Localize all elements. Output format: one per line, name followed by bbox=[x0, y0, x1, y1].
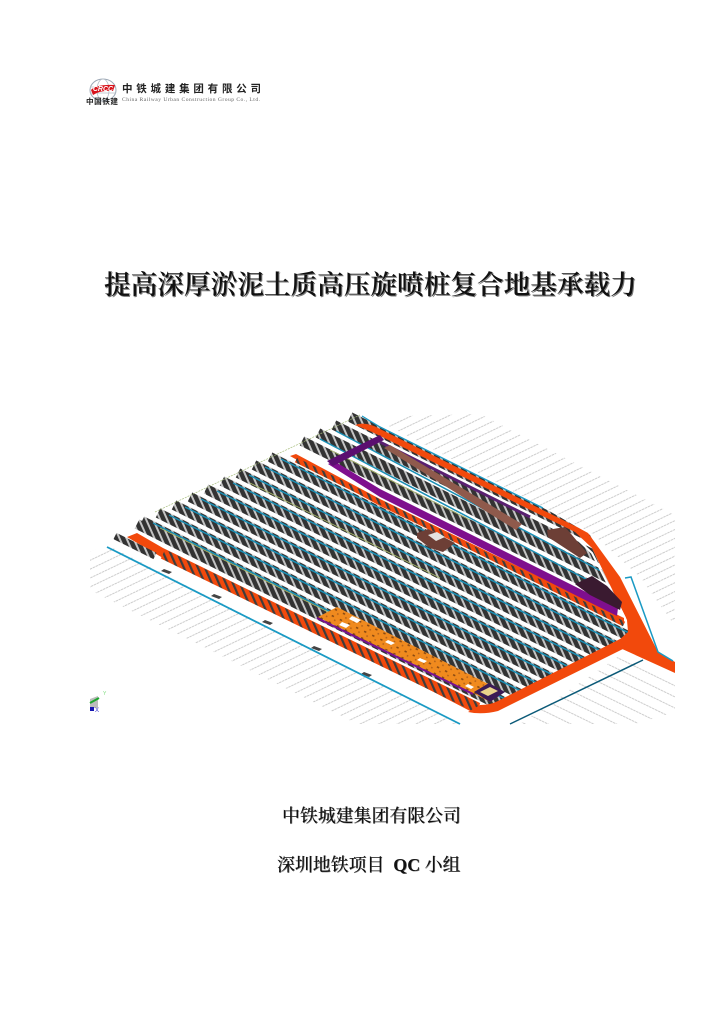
hatch: upper right grid bbox=[385, 414, 675, 626]
brown block centre bbox=[417, 529, 455, 552]
left edge survey line bbox=[155, 415, 360, 512]
teeth over orange strip bbox=[163, 554, 478, 708]
company logo bbox=[86, 78, 261, 106]
blue rails bbox=[152, 430, 628, 699]
orange work zone bbox=[318, 607, 504, 702]
yellow block bbox=[474, 683, 505, 702]
left end piles bbox=[115, 536, 155, 556]
green survey lines bbox=[160, 450, 470, 613]
white inner edge bbox=[372, 436, 625, 618]
orange bottom strip bbox=[127, 533, 480, 712]
dark blue dimension line bbox=[510, 660, 643, 724]
axis icon: Y bbox=[103, 691, 107, 697]
upper orange edge bbox=[355, 424, 675, 673]
title: 提高深厚淤泥土质高压旋喷桩复合地基承载力 bbox=[104, 270, 637, 300]
icon: CRCC globe emblem: CRCC bbox=[93, 86, 114, 93]
3D site model bbox=[90, 412, 675, 725]
logo company name: 中铁城建集团有限公司 bbox=[122, 82, 261, 95]
blue outer line right bbox=[625, 577, 673, 661]
brown beam bbox=[384, 445, 522, 530]
blue outer line lower bbox=[107, 547, 460, 724]
company name: 中铁城建集团有限公司 bbox=[282, 806, 461, 826]
hatch: lower right grid bbox=[520, 652, 675, 724]
purple work zone edge bbox=[317, 618, 473, 694]
pile rows bbox=[134, 412, 628, 704]
lower orange edge bbox=[468, 639, 625, 713]
icon: CRCC globe emblem bbox=[90, 79, 116, 101]
white patches on work zone bbox=[339, 616, 474, 689]
brown blocks right bbox=[547, 527, 587, 558]
second orange strip bbox=[290, 454, 624, 624]
purple long beam bbox=[328, 461, 618, 616]
piles and rails bbox=[134, 412, 628, 704]
blue outer line upper bbox=[362, 416, 543, 508]
purple upper frame bbox=[327, 435, 384, 466]
axis icon: X bbox=[95, 708, 99, 714]
logo brand text: 中国铁建 bbox=[86, 96, 118, 106]
dark purple blocks bbox=[575, 576, 622, 610]
axis icon bbox=[90, 691, 107, 714]
logo english name: China Railway Urban Construction Group Co., Ltd. bbox=[122, 97, 261, 103]
white gaps between rows bbox=[151, 455, 628, 697]
small markers bbox=[161, 569, 372, 677]
hatch: lower left grid bbox=[90, 545, 460, 724]
project team name: 深圳地铁项目 QC 小组 bbox=[277, 855, 460, 875]
